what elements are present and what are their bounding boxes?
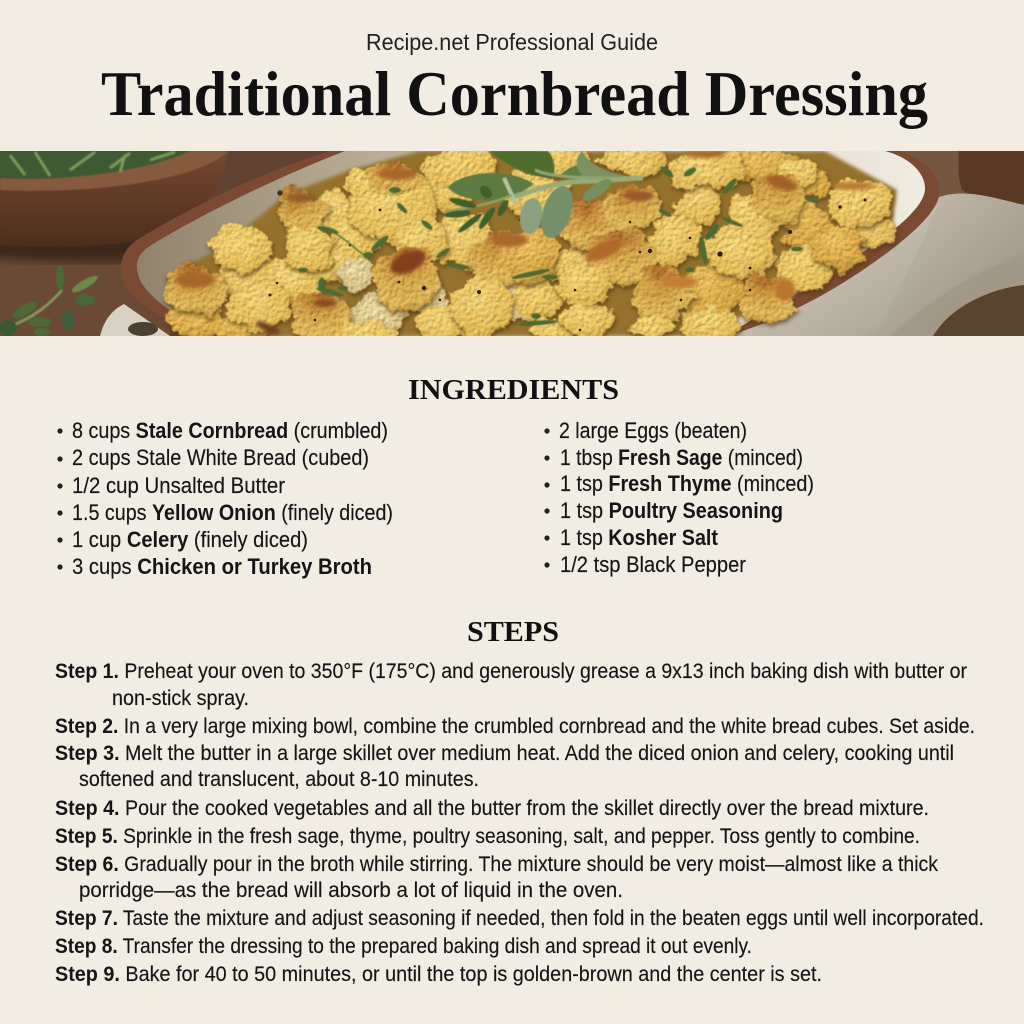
title: Traditional Cornbread Dressing: [101, 58, 928, 129]
wooden spoon: [932, 284, 1024, 336]
jar background right: [958, 151, 1024, 204]
ingredients list: left column: 2 cups Stale White Bread (cubed): [72, 445, 369, 470]
thyme sprig bottom left: [0, 265, 100, 336]
ingredients heading: INGREDIENTS: [408, 374, 619, 406]
ingredients list: left column: 8 cups Stale Cornbread (crumbled): [72, 418, 388, 443]
wooden table: [0, 151, 900, 336]
dish inner wall: [137, 151, 925, 336]
ingredients list: right column: 1 tsp Fresh Thyme (minced): [560, 471, 814, 496]
steps list: Step 4. Pour the cooked vegetables and all the butter from the skillet directly over the bread mixture.: [55, 796, 929, 820]
steps list: [55, 659, 984, 986]
ingredients list: left column: 1 cup Celery (finely diced): [72, 527, 308, 552]
ingredients list: right column: 1 tsp Poultry Seasoning: [560, 498, 783, 523]
steps list: Step 6. Gradually pour in the broth while stirring. The mixture should be very moist—almost like a thick: [55, 852, 938, 876]
steps list: softened and translucent, about 8-10 minutes.: [79, 767, 479, 791]
header: [101, 29, 928, 129]
linen napkin: [860, 193, 1024, 336]
ingredients list: right column: 1 tsp Kosher Salt: [560, 525, 719, 550]
cornbread crumbs: front layer: [164, 151, 893, 344]
steps heading: STEPS: [467, 616, 559, 648]
cornbread crumbs: back layer: [169, 143, 894, 343]
ingredients list: right column: 1 tbsp Fresh Sage (minced): [560, 445, 803, 470]
steps list: Step 9. Bake for 40 to 50 minutes, or until the top is golden-brown and the center is set.: [55, 962, 822, 986]
steps list: Step 8. Transfer the dressing to the prepared baking dish and spread it out evenly.: [55, 934, 752, 958]
ingredients list: left column: 3 cups Chicken or Turkey Broth: [72, 554, 372, 579]
sage and thyme garnish: [445, 151, 643, 242]
steps list: non-stick spray.: [112, 686, 249, 710]
dish handle: [100, 304, 170, 336]
dish rim: [121, 151, 939, 336]
wooden bowl with herbs: [0, 151, 228, 247]
ingredients list: right column: 1/2 tsp Black Pepper: [560, 552, 746, 577]
ingredients list: left column: 1/2 cup Unsalted Butter: [72, 473, 285, 498]
ingredients list: right column: 2 large Eggs (beaten): [559, 418, 747, 443]
steps section: [55, 616, 984, 986]
scattered thyme: [298, 165, 820, 327]
subtitle: Recipe.net Professional Guide: [366, 29, 658, 55]
bowl shadow on table: [0, 240, 136, 265]
dish outer wall: [729, 205, 937, 336]
steps list: Step 3. Melt the butter in a large skillet over medium heat. Add the diced onion and celery, cooking until: [55, 741, 954, 765]
ingredients list: left column: [57, 418, 393, 579]
pepper specks: [268, 179, 866, 331]
steps list: porridge—as the bread will absorb a lot of liquid in the oven.: [79, 878, 623, 902]
crumb bed: [165, 151, 897, 336]
browned crusts: [175, 150, 875, 337]
ingredients list: left column: 1.5 cups Yellow Onion (finely diced): [72, 500, 393, 525]
steps list: Step 5. Sprinkle in the fresh sage, thyme, poultry seasoning, salt, and pepper. Toss gently to combine.: [55, 824, 920, 848]
hero photo: baked cornbread dressing in a dish: [0, 143, 1024, 344]
ingredients section: [57, 374, 814, 579]
ingredients list: right column: [544, 418, 814, 577]
